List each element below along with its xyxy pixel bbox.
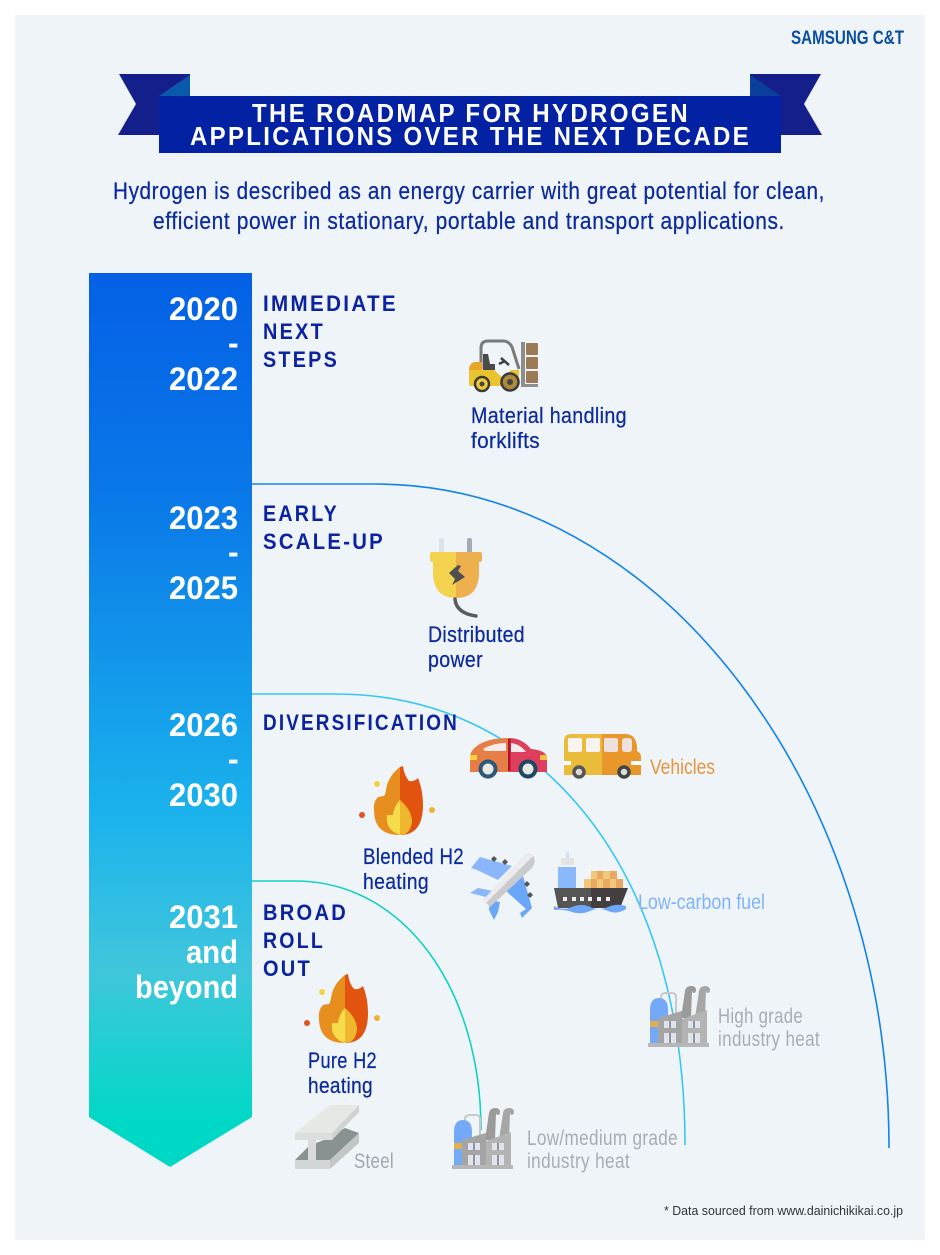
heading: broad roll out: BROAD xyxy=(263,900,348,925)
years 2031 and beyond: 2031 xyxy=(169,899,238,935)
heading: early scale-up: SCALE-UP xyxy=(263,529,385,554)
label: material handling forklifts xyxy=(471,403,627,453)
label: distributed power: power xyxy=(428,647,483,672)
icon: flame blended heating xyxy=(359,766,435,835)
icon: factory low/medium grade xyxy=(452,1108,514,1169)
label: steel: Steel xyxy=(354,1150,394,1173)
heading: broad roll out xyxy=(263,900,348,981)
years 2026-2030: 2026 xyxy=(169,707,238,743)
logo: Samsung C&T: SAMSUNG C&T xyxy=(791,28,904,49)
curve: early stage boundary xyxy=(252,484,889,1148)
icon: airplane xyxy=(470,854,535,920)
icon: flame pure heating xyxy=(304,974,380,1043)
icon: car xyxy=(470,738,547,776)
label: vehicles: Vehicles xyxy=(650,756,715,779)
label: pure h2 heating: Pure H2 xyxy=(308,1048,377,1073)
title banner xyxy=(118,74,822,153)
label: low/medium grade industry heat: Low/medium grade xyxy=(527,1127,678,1150)
label: high grade industry heat: High grade xyxy=(718,1005,803,1028)
heading: early scale-up: EARLY xyxy=(263,501,339,526)
label: distributed power: Distributed xyxy=(428,622,525,647)
title text xyxy=(190,98,751,151)
label: blended h2 heating: heating xyxy=(363,869,429,894)
years 2023-2025: 2025 xyxy=(169,570,238,606)
label: material handling forklifts: forklifts xyxy=(471,428,540,453)
heading: early scale-up xyxy=(263,501,385,554)
heading: diversification: DIVERSIFICATION xyxy=(263,710,459,735)
label: low/medium grade industry heat xyxy=(527,1127,678,1173)
label: low-carbon fuel: Low-carbon fuel xyxy=(638,891,765,914)
years 2031 and beyond xyxy=(135,899,238,1005)
label: pure h2 heating: heating xyxy=(308,1073,373,1098)
years 2020-2022: - xyxy=(228,325,239,361)
icon: bus xyxy=(564,734,641,777)
curve: scale-up boundary xyxy=(252,694,685,1145)
label: distributed power xyxy=(428,622,525,672)
years 2020-2022: 2022 xyxy=(169,361,238,397)
heading: immediate next steps: STEPS xyxy=(263,347,339,372)
icon: cargo ship xyxy=(554,852,628,913)
years 2023-2025: - xyxy=(228,534,239,570)
years 2031 and beyond: and xyxy=(186,934,238,970)
curve: diversification boundary xyxy=(252,881,481,1130)
title text: APPLICATIONS OVER THE NEXT DECADE xyxy=(190,121,751,151)
icon: plug xyxy=(430,538,482,616)
years 2026-2030: - xyxy=(228,741,239,777)
label: blended h2 heating xyxy=(363,844,464,894)
footnote: data source: * Data sourced from www.dainichikikai.co.jp xyxy=(664,1203,903,1218)
years 2026-2030: 2030 xyxy=(169,777,238,813)
label: high grade industry heat: industry heat xyxy=(718,1028,820,1051)
years 2023-2025 xyxy=(169,500,239,606)
heading: immediate next steps: IMMEDIATE xyxy=(263,291,398,316)
years 2031 and beyond: beyond xyxy=(135,969,238,1005)
heading: broad roll out: OUT xyxy=(263,956,312,981)
icon: forklift xyxy=(469,341,538,391)
label: blended h2 heating: Blended H2 xyxy=(363,844,464,869)
intro text: efficient power in stationary, portable and transport applications. xyxy=(153,208,785,235)
years 2026-2030 xyxy=(169,707,239,813)
label: pure h2 heating xyxy=(308,1048,377,1098)
label: high grade industry heat xyxy=(718,1005,820,1051)
intro text: Hydrogen is described as an energy carrier with great potential for clean, xyxy=(113,178,825,205)
intro text xyxy=(113,178,825,235)
title text: THE ROADMAP FOR HYDROGEN xyxy=(252,98,690,128)
timeline arrow bar xyxy=(89,273,252,1167)
years 2023-2025: 2023 xyxy=(169,500,238,536)
heading: immediate next steps xyxy=(263,291,398,372)
icon: factory high grade xyxy=(648,986,710,1047)
heading: immediate next steps: NEXT xyxy=(263,319,325,344)
years 2020-2022 xyxy=(169,291,239,397)
label: low/medium grade industry heat: industry heat xyxy=(527,1150,630,1173)
icon: steel beam xyxy=(295,1105,359,1169)
years 2020-2022: 2020 xyxy=(169,291,238,327)
heading: broad roll out: ROLL xyxy=(263,928,325,953)
label: material handling forklifts: Material handling xyxy=(471,403,627,428)
